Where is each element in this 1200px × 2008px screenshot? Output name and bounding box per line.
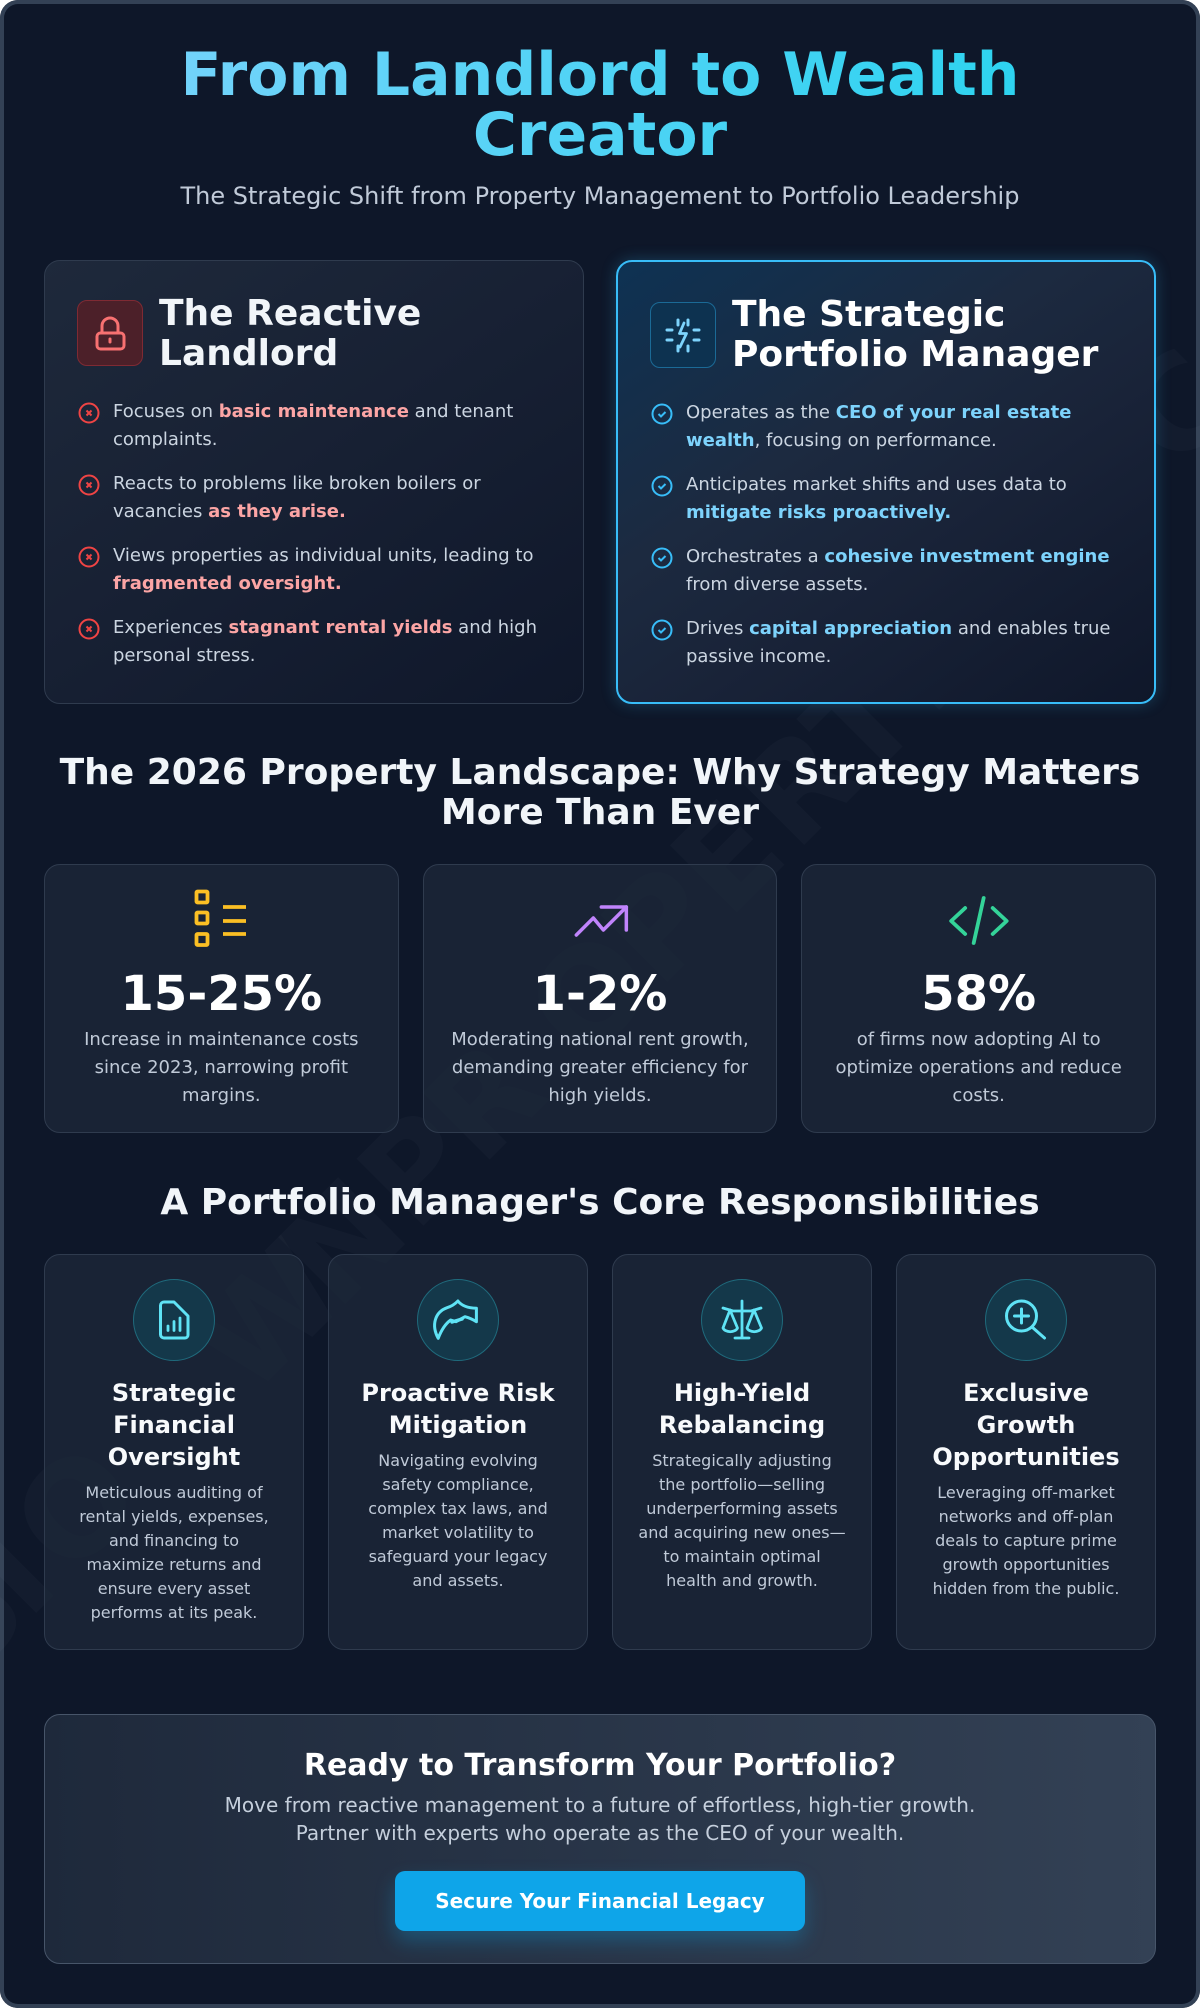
- stat card: AI adoption: [801, 864, 1156, 1133]
- card text: and assets.: [412, 1571, 504, 1590]
- panel heading: reactive landlord: The Reactive: [159, 293, 421, 334]
- panel heading: strategic portfolio manager: The Strategic: [732, 294, 1005, 334]
- card text: to maintain optimal: [663, 1547, 821, 1566]
- list item: CEO: Operates as the CEO of your real estate: [686, 402, 1071, 423]
- card text: [79, 1483, 269, 1622]
- list item: anticipates: [652, 474, 1067, 523]
- stat description: high yields.: [548, 1085, 652, 1106]
- card heading: High-Yield: [674, 1379, 810, 1407]
- cta button: [395, 1871, 805, 1931]
- stat description: since 2023, narrowing profit: [95, 1057, 348, 1078]
- card heading: [932, 1379, 1120, 1471]
- card text: deals to capture prime: [935, 1531, 1117, 1550]
- card text: rental yields, expenses,: [79, 1507, 269, 1526]
- stat description: optimize operations and reduce: [836, 1057, 1122, 1078]
- stat description: demanding greater efficiency for: [452, 1057, 748, 1078]
- title: Creator: [473, 100, 727, 170]
- icon: shield: [417, 1279, 499, 1361]
- panel heading: reactive landlord: [77, 293, 421, 374]
- card: strategic financial oversight: [44, 1254, 304, 1650]
- card: exclusive growth opportunities: [896, 1254, 1156, 1650]
- card heading: Strategic: [112, 1379, 236, 1407]
- card heading: Financial: [113, 1411, 235, 1439]
- card text: the portfolio—selling: [659, 1475, 825, 1494]
- heading: property landscape: [60, 752, 1140, 833]
- heading: property landscape: More Than Ever: [441, 792, 759, 833]
- card heading: Rebalancing: [659, 1411, 825, 1439]
- card heading: Oversight: [108, 1443, 240, 1471]
- card: high-yield rebalancing: [612, 1254, 872, 1650]
- list item: drives: [652, 618, 1110, 667]
- card text: health and growth.: [666, 1571, 818, 1590]
- card heading: Opportunities: [932, 1443, 1120, 1471]
- stat card: rent growth: [423, 864, 777, 1133]
- icon: magnifier: [985, 1279, 1067, 1361]
- card text: growth opportunities: [942, 1555, 1110, 1574]
- icon: trending up: [574, 905, 628, 937]
- heading: core responsibilities: A Portfolio Manager's Core Responsibilities: [160, 1182, 1040, 1223]
- list item: fragmented: Views properties as individual units, leading to: [113, 545, 533, 566]
- list item: reacts: vacancies as they arise.: [113, 501, 346, 522]
- stat: 58%: 58%: [921, 966, 1036, 1022]
- icon: lock: [77, 300, 143, 366]
- card text: maximize returns and: [86, 1555, 262, 1574]
- icon: scales: [701, 1279, 783, 1361]
- card heading: [361, 1379, 555, 1439]
- card text: Leveraging off-market: [937, 1483, 1115, 1502]
- panel: the reactive landlord: [44, 260, 584, 704]
- card heading: Mitigation: [389, 1411, 527, 1439]
- card text: and financing to: [109, 1531, 239, 1550]
- list item: orchestrates: Orchestrates a cohesive investment engine: [686, 546, 1110, 567]
- stat description: of firms now adopting AI to: [857, 1029, 1101, 1050]
- list item: stagnant: personal stress.: [113, 645, 255, 666]
- list item: maintenance: complaints.: [113, 429, 217, 450]
- card text: Navigating evolving: [378, 1451, 538, 1470]
- list item: drives: passive income.: [686, 646, 831, 667]
- list item: CEO: [652, 402, 1071, 451]
- list item: maintenance: [78, 401, 513, 450]
- card text: market volatility to: [382, 1523, 534, 1542]
- call to action panel: [44, 1714, 1156, 1964]
- stat description: [451, 1029, 749, 1106]
- card text: complex tax laws, and: [368, 1499, 548, 1518]
- card text: [933, 1483, 1119, 1598]
- card heading: Proactive Risk: [361, 1379, 555, 1407]
- title: From Landlord to Wealth: [181, 40, 1019, 110]
- card heading: [659, 1379, 825, 1439]
- list item: drives: Drives capital appreciation and enables true: [686, 618, 1110, 639]
- list item: orchestrates: from diverse assets.: [686, 574, 868, 595]
- icon: code: [949, 896, 1009, 945]
- list item: reacts: [78, 473, 481, 522]
- stat description: Increase in maintenance costs: [84, 1029, 359, 1050]
- cta text: Partner with experts who operate as the CEO of your wealth.: [296, 1821, 904, 1845]
- card text: [368, 1451, 548, 1590]
- list item: anticipates: Anticipates market shifts and uses data to: [686, 474, 1067, 495]
- card text: performs at its peak.: [91, 1603, 257, 1622]
- cta text: [225, 1793, 975, 1845]
- card text: hidden from the public.: [933, 1579, 1119, 1598]
- list item: anticipates: mitigate risks proactively.: [686, 502, 951, 523]
- stat description: [84, 1029, 359, 1106]
- card text: Strategically adjusting: [652, 1451, 832, 1470]
- cta heading: Ready to Transform Your Portfolio?: [304, 1748, 896, 1783]
- icon: file chart: [133, 1279, 215, 1361]
- card text: underperforming assets: [646, 1499, 838, 1518]
- panel: the strategic portfolio manager: [616, 260, 1156, 704]
- heading: property landscape: The 2026 Property Landscape: Why Strategy Matters: [60, 752, 1140, 793]
- stat: 1-2%: 1-2%: [533, 966, 667, 1022]
- title: [44, 45, 1156, 165]
- icon: checklist: [194, 890, 246, 947]
- stat card: maintenance costs: [44, 864, 399, 1133]
- card text: Meticulous auditing of: [85, 1483, 263, 1502]
- panel heading: reactive landlord: Landlord: [159, 333, 338, 374]
- card text: safety compliance,: [382, 1475, 534, 1494]
- list item: CEO: wealth, focusing on performance.: [686, 430, 997, 451]
- list item: fragmented: fragmented oversight.: [113, 573, 342, 594]
- panel heading: strategic portfolio manager: Portfolio Manager: [732, 334, 1098, 374]
- card text: safeguard your legacy: [369, 1547, 547, 1566]
- card heading: Exclusive: [963, 1379, 1089, 1407]
- stat description: costs.: [952, 1085, 1005, 1106]
- card heading: Growth: [977, 1411, 1075, 1439]
- card text: networks and off-plan: [939, 1507, 1113, 1526]
- subtitle: The Strategic Shift from Property Management to Portfolio Leadership: [181, 182, 1019, 210]
- list item: stagnant: [78, 617, 537, 666]
- cta text: Move from reactive management to a future of effortless, high-tier growth.: [225, 1793, 975, 1817]
- card: proactive risk mitigation: [328, 1254, 588, 1650]
- card text: [638, 1451, 846, 1590]
- card text: and acquiring new ones—: [638, 1523, 846, 1542]
- list item: reacts: Reacts to problems like broken boilers or: [113, 473, 481, 494]
- stat description: margins.: [182, 1085, 261, 1106]
- list item: stagnant: Experiences stagnant rental yields and high: [113, 617, 537, 638]
- stat description: [836, 1029, 1122, 1106]
- stat: 15-25%: 15-25%: [121, 966, 322, 1022]
- cta button: Secure Your Financial Legacy: [435, 1889, 765, 1913]
- card heading: [108, 1379, 240, 1471]
- list item: orchestrates: [652, 546, 1110, 595]
- panel heading: strategic portfolio manager: [650, 294, 1098, 374]
- stat description: Moderating national rent growth,: [451, 1029, 749, 1050]
- list item: maintenance: Focuses on basic maintenance and tenant: [113, 401, 513, 422]
- card text: ensure every asset: [98, 1579, 250, 1598]
- list item: fragmented: [78, 545, 533, 594]
- icon: chip with bolt: [650, 302, 716, 368]
